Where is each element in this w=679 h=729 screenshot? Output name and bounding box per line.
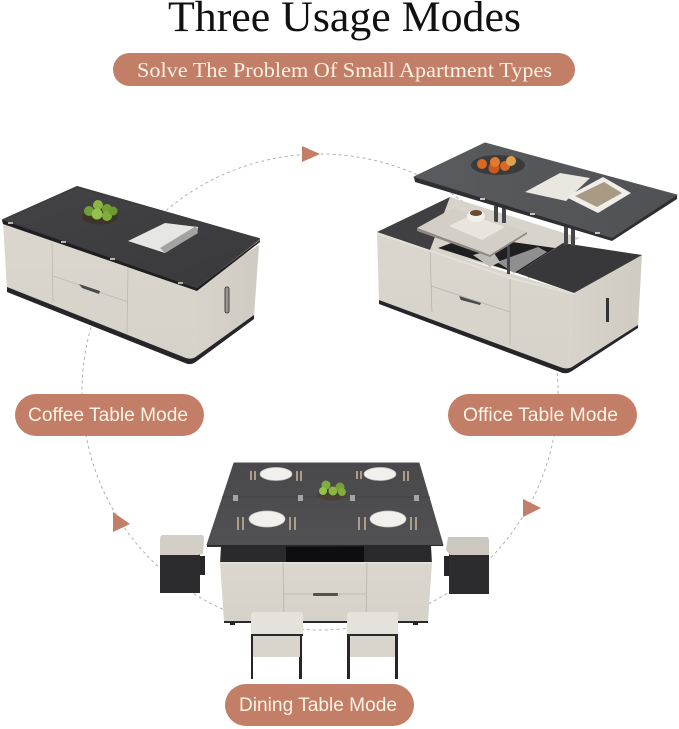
book [473, 250, 500, 267]
subtitle pill: Solve The Problem Of Small Apartment Types [137, 58, 552, 82]
icon: fruit bowl [82, 200, 118, 224]
coffee table top [3, 187, 259, 287]
icon: open magazine [525, 173, 631, 213]
office table interior [377, 197, 480, 250]
coffee table body [3, 222, 259, 364]
dashed circular flow path [82, 154, 558, 630]
stool: front left [251, 612, 303, 679]
label: coffee table mode: Coffee Table Mode [28, 405, 188, 426]
raised table top [414, 143, 677, 238]
label: dining table mode: Dining Table Mode [239, 695, 397, 716]
arrow: left [113, 512, 130, 532]
dining table top [207, 463, 443, 545]
lift mechanism [494, 206, 575, 274]
icon: newspaper [128, 223, 198, 253]
dining table illustration [160, 463, 489, 679]
small raised tray [417, 208, 527, 257]
stool: right [444, 537, 489, 594]
label: office table mode [448, 394, 637, 436]
label: dining table mode [225, 684, 414, 726]
icon: orange bowl [471, 155, 525, 175]
hinges [8, 222, 183, 284]
cutlery [238, 471, 416, 530]
arrow: top [302, 146, 320, 162]
stool: left [160, 535, 205, 593]
hinges [233, 495, 419, 501]
subtitle pill [113, 53, 575, 86]
arrow: right [523, 499, 541, 517]
icon: green fruit bowl [317, 480, 347, 500]
plate settings [249, 468, 406, 527]
office table body [377, 232, 642, 373]
dining table body [220, 546, 432, 625]
coffee table illustration [2, 187, 260, 364]
stool: front right [347, 612, 398, 679]
patterned cushion [497, 247, 547, 273]
label: office table mode: Office Table Mode [463, 405, 618, 426]
hinges [480, 198, 600, 234]
office table illustration [377, 143, 677, 373]
label: coffee table mode [15, 394, 204, 436]
